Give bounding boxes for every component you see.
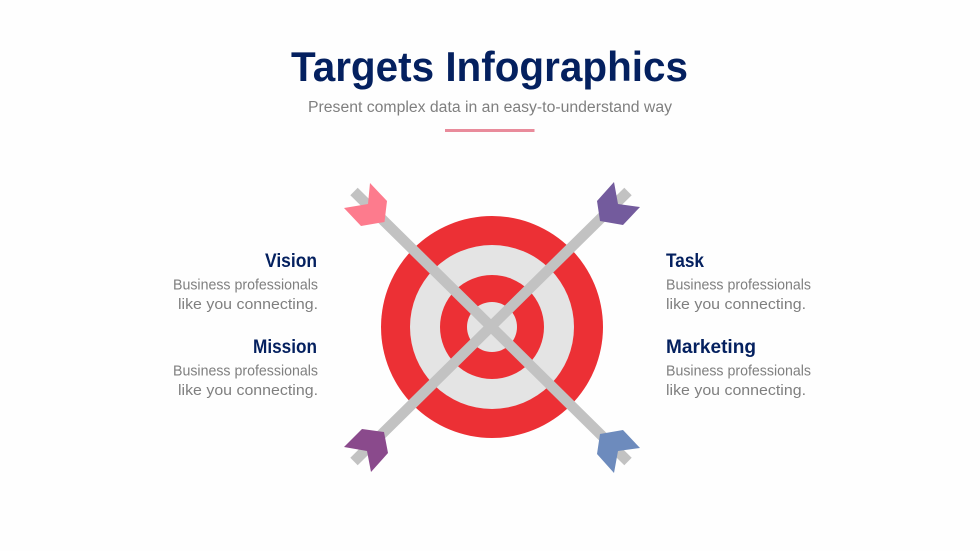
text block: Marketing: like you connecting. xyxy=(666,382,806,399)
text block: Task: like you connecting. xyxy=(666,296,806,313)
title underline accent xyxy=(445,129,534,132)
text block: Mission xyxy=(173,337,318,399)
text block: Mission: Business professionals xyxy=(173,362,318,380)
text block: Vision xyxy=(173,251,318,313)
text block: Mission: like you connecting. xyxy=(178,382,318,399)
arrow fletching: pink, top left xyxy=(344,183,387,226)
text block: Task: Task xyxy=(666,251,704,272)
target with arrows xyxy=(344,182,640,473)
arrow fletching: blue, bottom right xyxy=(597,430,640,473)
arrow fletching: violet, top right xyxy=(597,182,640,225)
text block: Marketing: Business professionals xyxy=(666,362,811,380)
text block: Task xyxy=(666,251,811,313)
text block: Mission: Mission xyxy=(253,337,317,358)
text block: Vision: Vision xyxy=(265,251,317,272)
text block: Marketing: Marketing xyxy=(666,337,756,358)
text block: Vision: Business professionals xyxy=(173,276,318,294)
text block: Marketing xyxy=(666,337,811,399)
arrow shafts xyxy=(354,192,628,462)
target rings xyxy=(381,216,603,438)
subtitle: Present complex data in an easy-to-understand way xyxy=(308,99,672,116)
title: Targets Infographics xyxy=(291,43,688,90)
text block: Task: Business professionals xyxy=(666,276,811,294)
arrow fletching: plum, bottom left xyxy=(344,429,388,472)
text block: Vision: like you connecting. xyxy=(178,296,318,313)
